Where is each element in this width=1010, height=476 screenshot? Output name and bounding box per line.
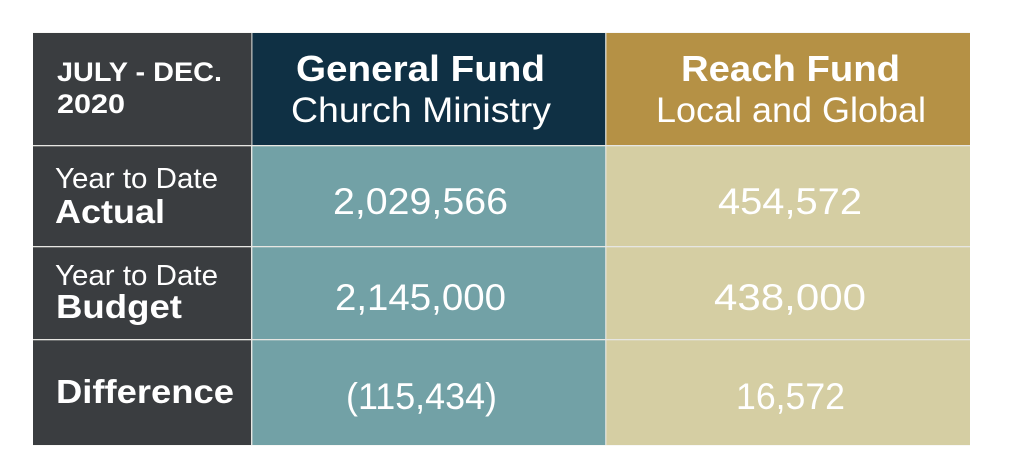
value: reach fund budget: 438,000 (714, 277, 866, 318)
value: reach fund difference: 16,572 (736, 376, 845, 417)
row label: Year to Date Actual: Actual (55, 193, 165, 230)
row label: Year to Date Actual: Year to Date (55, 163, 218, 195)
heading: Reach Fund: Reach Fund (681, 48, 900, 89)
row label: Year to Date Budget: Budget (56, 288, 182, 325)
row label: Difference: Difference (56, 373, 234, 410)
row label: Year to Date Budget (55, 260, 218, 325)
heading: General Fund (291, 48, 552, 130)
heading: period: JULY - DEC. (57, 57, 222, 87)
heading: General Fund: Church Ministry (291, 91, 552, 130)
row label: Year to Date Actual (55, 163, 218, 230)
row label: Year to Date Budget: Year to Date (55, 260, 218, 292)
heading: period: 2020 (57, 89, 125, 119)
heading: period (57, 57, 222, 119)
value: general fund difference: (115,434) (346, 376, 497, 417)
value: reach fund actual: 454,572 (718, 181, 862, 222)
heading: General Fund: General Fund (296, 48, 545, 89)
heading: Reach Fund: Local and Global (656, 91, 926, 130)
heading: Reach Fund (656, 48, 926, 130)
value: general fund actual: 2,029,566 (333, 181, 508, 222)
value: general fund budget: 2,145,000 (335, 277, 506, 318)
